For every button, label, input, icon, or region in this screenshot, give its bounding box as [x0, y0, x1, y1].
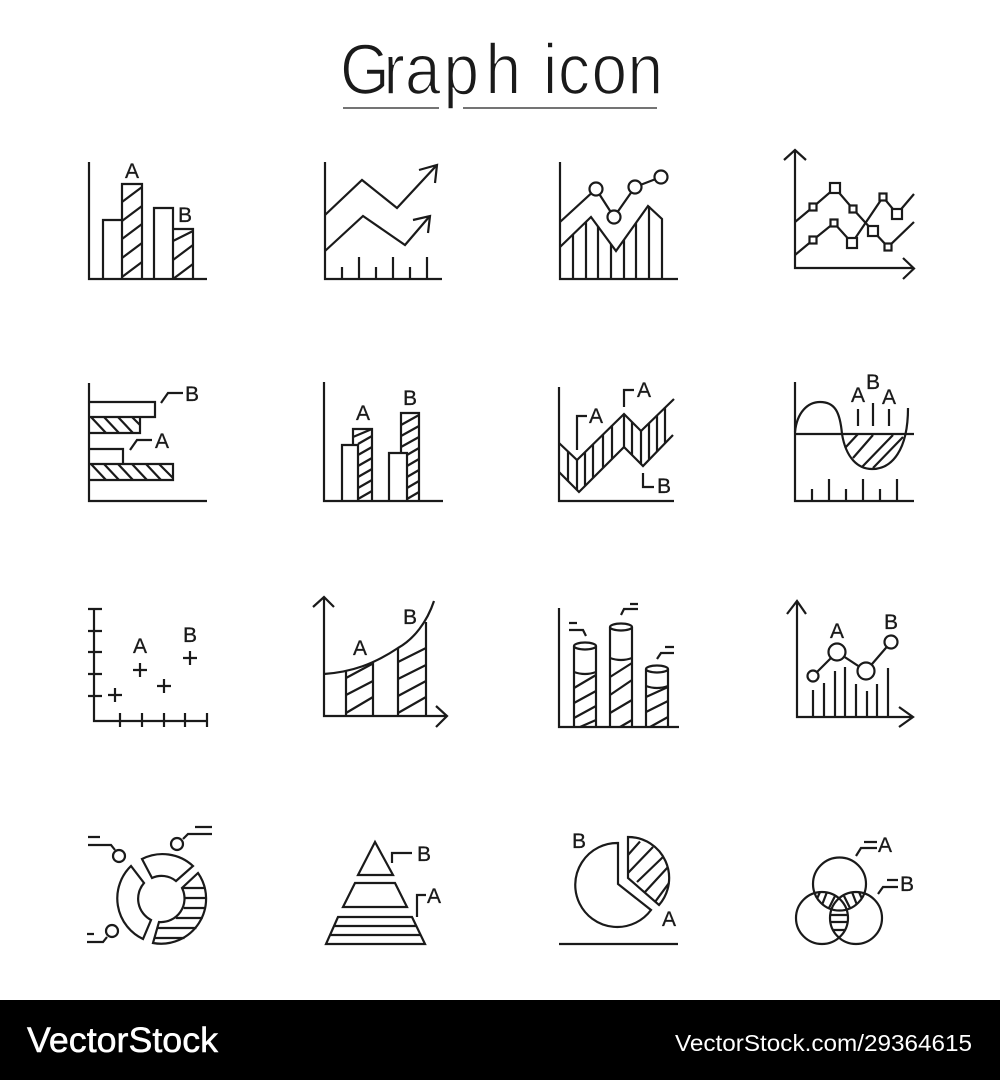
icon: cylinder chart	[559, 604, 679, 727]
labels: A	[662, 908, 676, 931]
callouts	[856, 842, 898, 894]
labels	[851, 371, 896, 409]
labels: B	[403, 606, 417, 629]
icon: horizontal bars A B	[89, 383, 207, 501]
middle tier	[343, 883, 407, 907]
labels: A	[427, 885, 441, 908]
baseline	[559, 943, 678, 945]
label stems	[858, 403, 889, 426]
labels: A	[353, 637, 367, 660]
callout brackets	[577, 390, 654, 487]
labels: B	[572, 830, 586, 853]
footer bar	[0, 1000, 1000, 1080]
labels: B	[403, 387, 417, 410]
labels: A	[851, 384, 865, 407]
icon: scatter plot	[88, 609, 207, 727]
labels	[155, 383, 199, 453]
labels	[125, 160, 192, 227]
top segment	[142, 854, 193, 881]
slice hatching	[628, 842, 669, 902]
icon: sine wave chart	[795, 371, 914, 501]
bars	[813, 667, 888, 717]
right overlap hatching	[844, 892, 863, 908]
axes	[560, 162, 678, 279]
plain columns	[342, 445, 407, 501]
bars	[103, 184, 193, 279]
hatched columns	[353, 413, 419, 501]
sine curve	[795, 402, 908, 469]
labels	[878, 834, 914, 896]
brand: VectorStock	[27, 1021, 219, 1060]
column hatching	[353, 415, 419, 499]
circles	[796, 858, 882, 944]
ticks	[812, 479, 897, 501]
bottom tier	[326, 917, 425, 944]
labels	[417, 843, 441, 908]
right hatched segment	[153, 873, 206, 944]
hatched slice	[628, 837, 669, 905]
plus points	[108, 651, 197, 702]
callouts	[569, 604, 674, 659]
icon: pie chart	[559, 830, 678, 944]
labels: B	[900, 873, 914, 896]
icon: striped band chart	[559, 379, 674, 501]
axes	[559, 608, 679, 727]
labels: B	[884, 611, 898, 634]
cylinder tops	[574, 624, 668, 672]
labels: A	[125, 160, 139, 183]
callouts	[392, 853, 426, 917]
labels	[353, 606, 417, 660]
connecting line	[813, 642, 891, 676]
callout dots	[106, 838, 183, 937]
labels: B	[183, 624, 197, 647]
labels: B	[866, 371, 880, 394]
bar hatching	[91, 417, 173, 480]
main pie	[575, 843, 651, 927]
labels	[356, 387, 417, 425]
icon: line and area with dots	[560, 162, 678, 279]
icon: area under curve	[313, 597, 447, 727]
callouts	[87, 827, 212, 942]
axes	[324, 382, 443, 501]
line dots	[590, 170, 668, 224]
labels: A	[133, 635, 147, 658]
area outline	[560, 206, 662, 279]
labels	[133, 624, 197, 658]
left segment	[117, 866, 151, 939]
labels: A	[356, 402, 370, 425]
overlap hatching	[816, 892, 835, 908]
area stripes	[573, 206, 649, 279]
labels: A	[155, 430, 169, 453]
dotted line	[560, 177, 661, 222]
hatching	[346, 648, 426, 713]
square markers	[810, 183, 902, 250]
upper arrow line	[325, 165, 437, 215]
axes and ticks	[88, 609, 207, 727]
icon: two lines with square markers	[784, 150, 914, 279]
dots	[808, 636, 898, 682]
lower overlap hatching	[831, 914, 847, 936]
top tier	[358, 842, 393, 875]
icon: segmented donut	[87, 827, 212, 944]
bar hatching	[122, 187, 193, 279]
segment hatching	[154, 888, 207, 938]
labels: A	[830, 620, 844, 643]
hatching	[845, 434, 903, 468]
lower arrow line	[325, 216, 430, 251]
black band	[0, 1000, 1000, 1080]
labels	[572, 830, 676, 931]
labels: A	[637, 379, 651, 402]
labels: B	[657, 475, 671, 498]
labels: B	[185, 383, 199, 406]
icon: dots over bars	[787, 601, 913, 727]
line one	[795, 188, 914, 247]
hatching	[574, 663, 668, 727]
labels: A	[589, 405, 603, 428]
axes with arrows	[313, 597, 447, 727]
axes	[559, 387, 674, 501]
labels: A	[878, 834, 892, 857]
band edges	[559, 399, 674, 492]
zero line	[795, 433, 914, 435]
labels	[830, 611, 898, 643]
axes	[89, 383, 207, 501]
labels: A	[882, 386, 896, 409]
icon: paired columns A B	[324, 382, 443, 501]
icon: rising line arrows	[325, 162, 442, 279]
dividers	[346, 622, 426, 716]
axes	[325, 162, 442, 279]
icon: bar chart A B	[89, 160, 207, 279]
labels	[589, 379, 671, 498]
axes	[795, 382, 914, 501]
axes with arrows	[784, 150, 914, 279]
title text: Graph icon	[340, 31, 663, 110]
icon: pyramid	[326, 842, 441, 944]
labels: B	[178, 204, 192, 227]
curve	[324, 601, 434, 674]
line two	[795, 194, 914, 255]
url: VectorStock.com/29364615	[675, 1030, 972, 1056]
fill levels	[574, 658, 668, 688]
bars	[89, 402, 173, 480]
ticks	[342, 257, 427, 279]
cylinder bodies	[574, 627, 668, 727]
title underline	[343, 107, 657, 109]
axes with arrows	[787, 601, 913, 727]
labels: B	[417, 843, 431, 866]
callout lines	[130, 393, 183, 450]
icon: venn diagram	[796, 834, 914, 944]
axes	[89, 162, 207, 279]
band stripes	[568, 407, 665, 490]
